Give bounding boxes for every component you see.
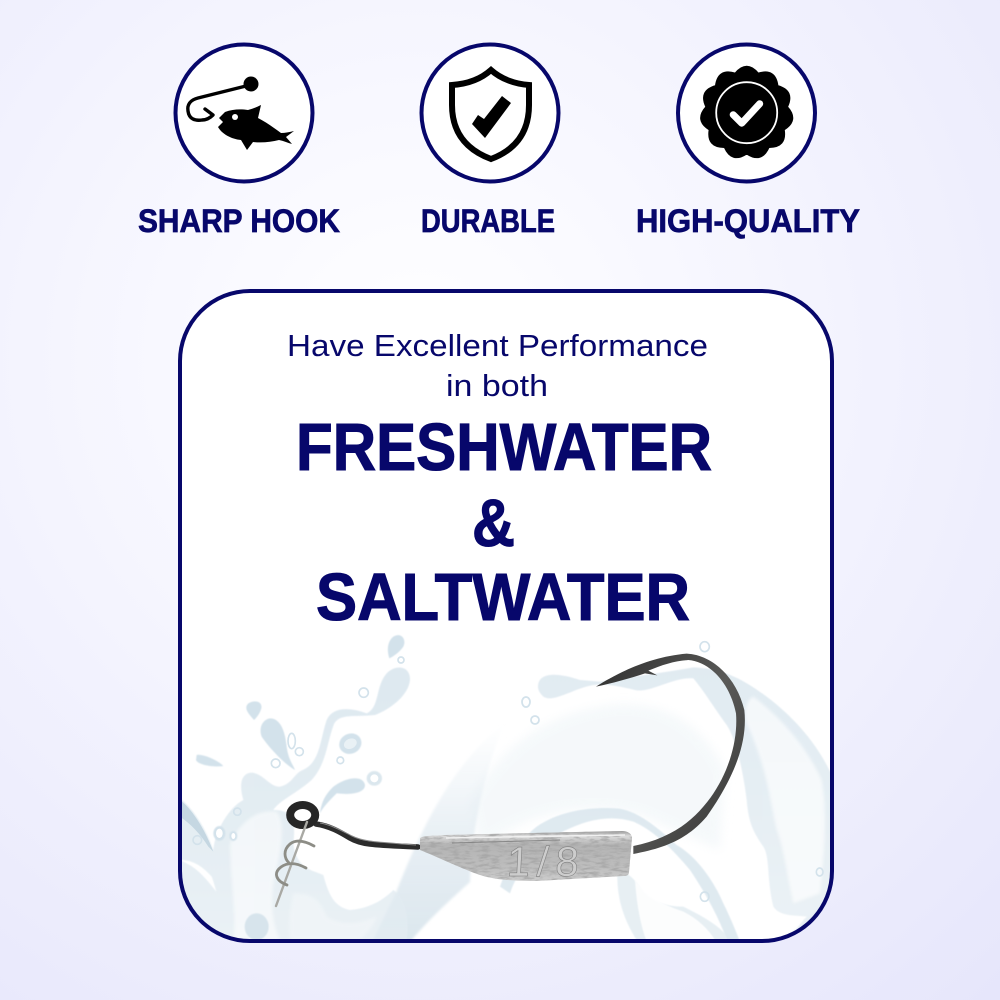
icon: fish	[218, 105, 294, 150]
hook shank and eye	[290, 805, 418, 847]
screw-lock coil	[276, 822, 314, 906]
icon: scalloped seal	[701, 67, 793, 157]
heading: saltwater: SALTWATER	[316, 560, 690, 635]
weight marking: 1/8	[506, 838, 580, 885]
heading: freshwater: FRESHWATER	[296, 410, 712, 485]
icon: high-quality seal badge	[678, 44, 815, 182]
sweeping arc band	[396, 764, 486, 939]
icon: hook with bead	[188, 76, 258, 120]
droplets	[196, 635, 404, 940]
heading: sharp hook: SHARP HOOK	[138, 203, 340, 239]
faint central wash	[478, 709, 720, 840]
left splash	[180, 635, 410, 940]
icon: durable shield badge	[422, 44, 558, 182]
text: intro line one: Have Excellent Performance	[287, 328, 708, 363]
panel: freshwater and saltwater	[180, 291, 843, 950]
icon: shield outline	[452, 70, 529, 159]
droplets by hook tip	[522, 697, 539, 724]
icon: shield check	[472, 96, 511, 138]
heading: ampersand: &	[472, 486, 515, 561]
text: intro line two: in both	[446, 368, 548, 403]
icon: sharp hook badge	[176, 44, 312, 182]
water splash illustration	[180, 635, 843, 950]
lead sinker weight	[420, 831, 632, 885]
fishing hook product illustration	[276, 654, 745, 906]
hook bend and barbed point	[596, 654, 745, 854]
right splash	[500, 642, 843, 950]
heading: high-quality: HIGH-QUALITY	[636, 203, 860, 239]
panel border	[180, 291, 832, 941]
heading: durable: DURABLE	[421, 203, 555, 239]
